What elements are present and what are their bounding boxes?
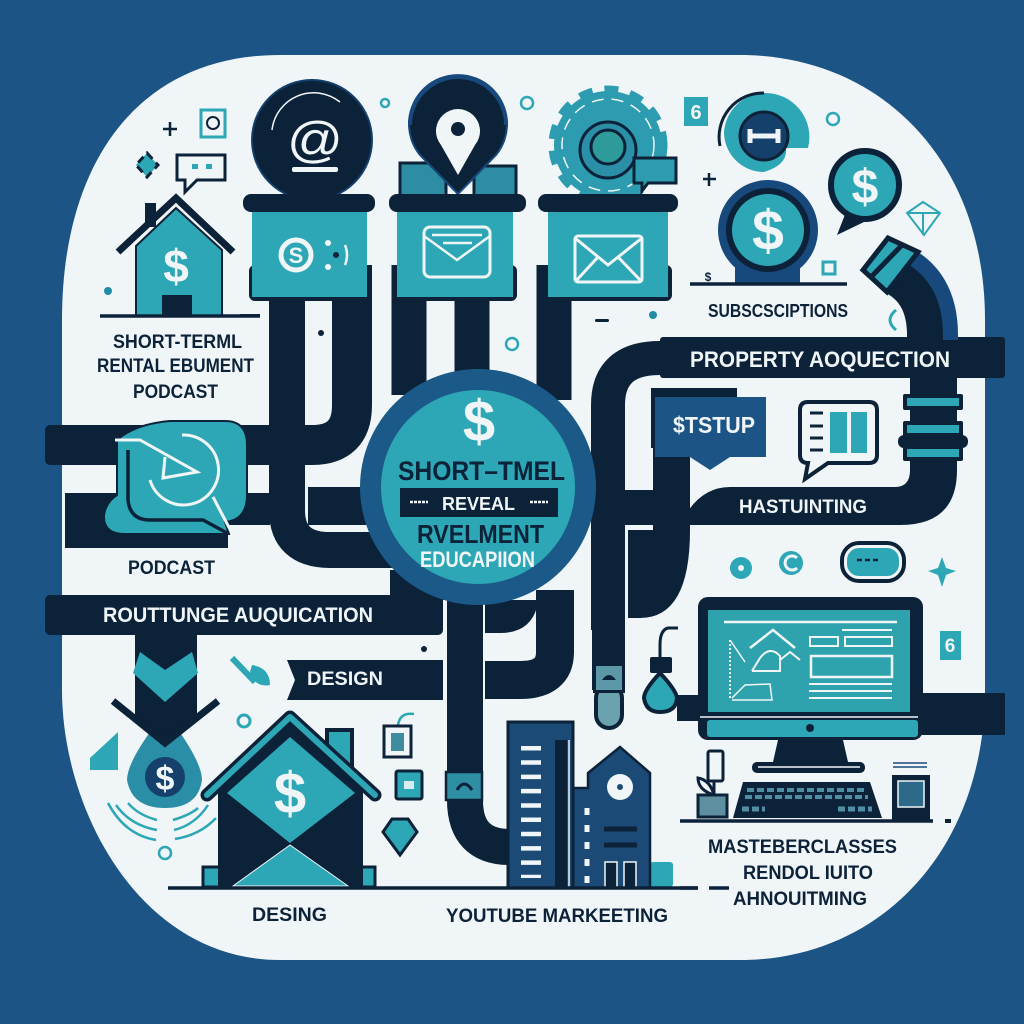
icon: small plus and square <box>163 110 225 137</box>
icon: diamond sparkle <box>136 153 158 177</box>
icon: dollar coin <box>690 180 847 284</box>
icon: startup sign: $TSTUP <box>673 412 755 438</box>
icon: dollar coin: $ <box>752 199 784 263</box>
icon: at sign circle: @ <box>287 112 343 168</box>
icon: design tag label <box>287 660 443 700</box>
icon: printer <box>892 763 930 820</box>
panel: teal funnel box 1: S <box>289 243 303 268</box>
icon: podcast speech bubble <box>104 421 247 535</box>
panel: teal funnel box 1 <box>243 194 375 301</box>
pipe: right clamps <box>898 394 968 461</box>
icon: hanging lightbulb <box>644 628 678 712</box>
icon: location pin <box>409 75 507 194</box>
icon: house with dollar: $ <box>163 240 189 292</box>
icon: pipe end plug <box>593 665 625 728</box>
center circle hub: EDUCAPIION <box>420 547 535 572</box>
icon: diamond outline <box>907 202 940 235</box>
icon: down chevrons <box>113 630 218 745</box>
icon: chat pill <box>842 543 904 581</box>
text: short-term rental podcast label: SHORT-TERML <box>113 332 242 353</box>
icon: computer monitor <box>698 597 923 740</box>
icon: big house with envelope: $ <box>274 761 306 826</box>
icon: at sign circle <box>252 80 372 200</box>
text: short-term rental podcast label: RENTAL EBUMENT <box>97 356 254 377</box>
icon: potted plant <box>698 751 727 817</box>
icon: buildings <box>430 722 698 888</box>
text: short-term rental podcast label <box>97 332 254 403</box>
center circle hub: SHORT–TMEL <box>398 456 565 486</box>
small rings <box>159 97 839 859</box>
separators between pipes <box>625 526 653 528</box>
icon: startup sign <box>651 388 766 470</box>
text: youtube marketing: YOUTUBE MARKEETING <box>446 906 668 927</box>
icon: wrench tools <box>232 658 270 727</box>
icon: money drop <box>127 712 202 808</box>
icon: plus <box>703 173 716 186</box>
icon: small number card: 6 <box>690 102 702 124</box>
pipe: upper right joint <box>863 238 933 340</box>
icon: teal gear <box>552 89 676 201</box>
icon: small decorations mid <box>383 714 422 855</box>
icon: dumbbell half disc <box>719 93 809 172</box>
icon: money drop: $ <box>156 760 175 798</box>
icon: dollar coin: $ <box>705 270 712 284</box>
icon: crescent <box>890 310 896 330</box>
icon: house with dollar <box>100 198 260 316</box>
small dots <box>104 287 657 652</box>
text: property acquisition: PROPERTY AOQUECTION <box>690 347 950 372</box>
text: routtunge auquication banner: ROUTTUNGE AUQUICATION <box>103 604 373 627</box>
icon: signal arcs <box>108 803 216 840</box>
icon: pipe arch marker <box>446 772 482 800</box>
panel: teal funnel box 3 with envelope <box>537 194 678 301</box>
text: masterclasses: MASTEBERCLASSES <box>708 837 897 858</box>
text: hastuiting: HASTUINTING <box>739 497 867 518</box>
icon: chat bubble <box>177 155 225 192</box>
icon: small house <box>90 732 118 770</box>
text: short-term rental podcast label: PODCAST <box>133 382 218 403</box>
icon: small card 6: 6 <box>945 636 955 657</box>
panel: teal funnel box 2 with envelope <box>389 194 526 301</box>
box: files behind pin <box>400 163 516 196</box>
center circle hub: REVEAL <box>442 494 515 514</box>
icon: design tag label: DESIGN <box>307 669 383 690</box>
text: masterclasses: RENDOL IUITO <box>743 863 873 884</box>
icon: speech dollar <box>831 151 899 235</box>
dots <box>730 551 803 579</box>
icon: small number card <box>684 97 708 126</box>
icon: speech dollar: $ <box>852 161 879 214</box>
center circle hub: RVELMENT <box>417 519 544 549</box>
pipes: navy network <box>45 265 1005 847</box>
text: podcast: PODCAST <box>128 558 215 579</box>
text: masterclasses: AHNOUITMING <box>733 889 867 910</box>
bottom dashes <box>680 886 729 890</box>
center circle hub <box>360 369 596 605</box>
icon: table speech bubble <box>800 402 877 479</box>
icon: small card 6 <box>940 631 961 660</box>
text: masterclasses <box>708 837 897 910</box>
panel: rounded white background <box>62 55 985 960</box>
text: subscriptions: SUBSCSCIPTIONS <box>708 301 848 321</box>
icon: big house with envelope <box>168 717 430 888</box>
icon: sparkle <box>928 557 956 587</box>
icon: stand and keyboard <box>680 740 951 823</box>
center circle hub: $ <box>463 389 495 454</box>
text: desing: DESING <box>252 905 327 926</box>
